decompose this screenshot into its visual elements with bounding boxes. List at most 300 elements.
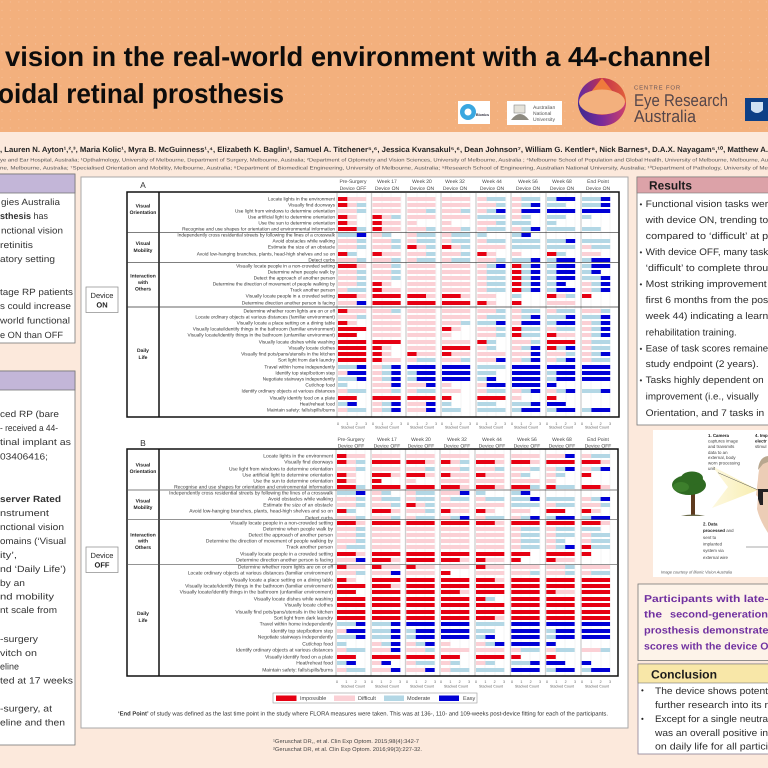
chart A (127, 179, 619, 430)
references: ²Geruschat DR, et al. Clin Exp Optom. 2016;99(3):227-32. (273, 747, 422, 753)
chart B column headers: Device OFF (374, 444, 400, 450)
chart A task labels: Visually locate dishes while washing (259, 340, 335, 346)
chart B task labels: Visually locate a place setting on a dining table (231, 578, 333, 584)
chart B section labels (130, 462, 156, 624)
icon: tree (672, 472, 706, 516)
chart A axis labels: 0 1 2 3 (581, 422, 611, 426)
chart A task labels: Maintain safety: falls/spills/burns (267, 408, 336, 414)
chart B axis labels: 0 1 2 3 (546, 680, 576, 684)
chart B section labels: Orientation (130, 469, 156, 475)
panel: methods: omains (‘Visual (0, 536, 66, 546)
chart A bars: end point (582, 199, 610, 410)
chart A column headers: Week 17 (377, 179, 397, 185)
title: oidal retinal prosthesis (0, 78, 284, 109)
label: data processed: external wire (703, 555, 728, 560)
logo: Centre for Eye Research Australia (578, 78, 728, 126)
device ON label: Device (91, 291, 113, 300)
callout: key finding (638, 584, 768, 660)
chart B bars: week 17 (372, 456, 400, 670)
panel: background: sthesis has (0, 211, 48, 221)
panel: results: • (640, 376, 642, 385)
chart A task labels: Locate lights in the environment (268, 197, 336, 203)
header banner (0, 0, 768, 132)
panel: results: improvement (i.e., visually (646, 392, 759, 402)
chart B axis labels: 0 1 2 3 (440, 680, 470, 684)
label: camera: unit (708, 466, 716, 471)
panel: conclusion: further research into its r (655, 700, 768, 711)
chart B column headers: Week 17 (377, 437, 397, 443)
chart A task labels: Use artificial light to determine orientation (248, 215, 335, 221)
panel: results: Functional vision tasks wer (646, 199, 768, 210)
chart B column headers: Device OFF (549, 444, 575, 450)
panel: methods: nctional vision (0, 522, 64, 532)
device OFF label (86, 547, 118, 572)
chart B task labels: Estimate the size of an obstacle (263, 503, 333, 509)
chart B column headers: Week 32 (447, 437, 467, 443)
label: implant: stimul (755, 444, 766, 449)
label: data processed: implanted (703, 542, 723, 546)
chart A bars: week 32 (442, 199, 470, 410)
chart A section labels: Visual (136, 241, 151, 247)
chart A axis labels: 0 1 2 3 (546, 422, 576, 426)
label: data processed: processed and (703, 528, 734, 533)
legend: Impossible (300, 696, 326, 702)
chart B column headers: Week 68 (552, 437, 572, 443)
chart A column headers: Week 32 (445, 179, 465, 185)
panel: conclusion: on daily life for all partici (655, 742, 768, 752)
panel: results: rehabilitation training. (646, 328, 737, 338)
logo: Australian National University: University (533, 117, 555, 123)
chart B task labels: Recognise and use shapes for orientation and environmental information (174, 485, 333, 491)
logo: Australian National University: National (533, 111, 551, 117)
chart A task labels: Use the sun to determine orientation (258, 221, 335, 227)
results heading (637, 177, 768, 193)
callout: key finding: second-generation (670, 610, 768, 620)
chart B axis labels: Stacked Count (515, 684, 539, 688)
logo: Australian National University (507, 101, 562, 125)
chart A axis labels: Stacked Count (375, 426, 399, 430)
chart B task labels: Visually locate/identify things in the bathroom (familiar environment) (185, 584, 333, 590)
logo: Bionics (458, 101, 490, 124)
chart B axis labels: Stacked Count (550, 684, 574, 688)
label: data processed: sent to (703, 535, 717, 540)
results heading: Results (649, 178, 692, 192)
chart B task labels: Determine direction another person is facing (236, 558, 333, 564)
chart A column headers: Pre-Surgery (340, 179, 367, 185)
chart A axis labels: Stacked Count (410, 426, 434, 430)
chart B axis labels: 0 1 2 3 (336, 680, 366, 684)
chart A section labels: Visual (136, 204, 151, 210)
chart A column headers: Device ON (375, 186, 399, 192)
chart B bars: pre-surgery (337, 456, 365, 670)
chart B task labels: Determine the direction of movement of people walking by (206, 539, 334, 545)
chart A task labels: Identify top step/bottom step (275, 371, 335, 377)
panel: background: e ON than OFF (0, 330, 64, 340)
device OFF label: Device (91, 551, 113, 560)
chart B task labels: Visually locate people in a non-crowded setting (230, 521, 333, 527)
chart A axis labels: Stacked Count (514, 426, 538, 430)
chart A column headers: Week 20 (412, 179, 432, 185)
chart B axis labels: 0 1 2 3 (406, 680, 436, 684)
chart A task labels: Visually find pots/pans/utensils in the kitchen (241, 352, 335, 358)
chart A axis labels: Stacked Count (445, 426, 469, 430)
panel: background: atory setting (0, 254, 55, 264)
icon: head with glasses (718, 456, 768, 547)
chart A task labels: Visually find doorways (288, 203, 336, 209)
chart A column headers: Device ON (443, 186, 467, 192)
panel: background: s could increase (0, 301, 71, 311)
chart B task labels: Cut/chop food (302, 642, 333, 648)
device OFF label: OFF (94, 560, 110, 570)
chart A task labels: Visually locate people in a non-crowded setting (236, 264, 335, 270)
chart B column headers: Week 56 (517, 437, 537, 443)
chart B axis labels: 0 1 2 3 (511, 680, 541, 684)
affiliations: ne, Melbourne, Australia; ⁷Specialised Orientation and Mobility, Melbourne, Australia; ⁸Department of Biomedical Engineering, University of Melbourne, Australia; ⁹Research School of Engineering, Australian National University, Australia; ¹⁰Department of Pathology, University of Me (0, 166, 768, 172)
chart B task labels: Visually locate clothes (284, 603, 334, 609)
chart B task labels: Identify top step/bottom step (271, 629, 333, 635)
title: vision in the real-world environment with a 44-channel (5, 41, 711, 72)
chart B column headers: Device OFF (479, 444, 505, 450)
callout: key finding: the (644, 610, 663, 620)
chart B task labels: Avoid obstacles while walking (268, 497, 333, 503)
device ON label (86, 287, 118, 312)
panel: methods: -surgery, at (0, 704, 53, 714)
chart B bars: week 44 (476, 456, 504, 670)
chart B section labels: Life (139, 618, 148, 624)
references: ¹Geruschat DR,, et al. Clin Exp Optom. 2015;98(4):342-7 (273, 739, 419, 745)
chart A: A (140, 180, 146, 190)
panel: conclusion: Except for a single neutra (655, 714, 768, 725)
chart A frame (127, 192, 619, 417)
chart B section labels: Others (135, 545, 151, 551)
panel: results: with device ON, trending to (645, 215, 768, 226)
chart B axis labels: 0 1 2 3 (371, 680, 401, 684)
panel: background: gies Australia (1, 197, 60, 207)
chart B bars: week 20 (406, 456, 435, 670)
chart A axis labels: 0 1 2 3 (441, 422, 471, 426)
chart A task labels: Negotiate stairways independently (263, 377, 336, 383)
chart A task labels: Recognise and use shapes for orientation and environmental information (182, 227, 335, 233)
chart A task labels: Visually locate people in a crowded setting (246, 294, 335, 300)
label: data processed: 2. Data (703, 522, 718, 526)
chart B column headers: Device OFF (408, 444, 434, 450)
chart B task labels: Detect the approach of another person (248, 533, 333, 539)
panel: methods: tinal implant as (0, 437, 72, 447)
chart B task labels: Independently cross residential streets by following the lines of a crosswalk (169, 491, 334, 497)
chart B task labels: Visually locate/identify things in the bathroom (unfamiliar environment) (180, 590, 333, 596)
chart A task labels: Track another person (290, 288, 335, 294)
panel: background: tage RP patients (0, 287, 74, 297)
chart A task labels: Visually locate clothes (288, 346, 336, 352)
label: implant: 4. Imp (755, 433, 768, 438)
chart B axis labels: Stacked Count (585, 684, 609, 688)
label: implant: electr (755, 438, 767, 444)
chart A axis labels: 0 1 2 3 (476, 422, 506, 426)
chart B column headers: Device OFF (338, 444, 364, 450)
label: camera: and transmits (708, 444, 735, 449)
chart A section labels: with (137, 280, 148, 286)
chart A bars: week 20 (407, 199, 436, 410)
chart B section labels: Visual (136, 462, 151, 468)
chart A section labels: Orientation (130, 210, 156, 216)
chart B bars: end point (582, 456, 610, 670)
panel: methods: ted at 17 weeks (0, 676, 74, 686)
chart A task labels: Visually locate a place setting on a dining table (237, 321, 335, 327)
chart A section labels: Mobility (134, 248, 153, 254)
chart A bars: week 68 (547, 199, 575, 410)
panel: methods: ced RP (bare (0, 409, 59, 419)
panel: methods (0, 371, 75, 745)
panel: background: nctional vision (1, 226, 63, 236)
chart A column headers: Device ON (550, 186, 574, 192)
chart A task labels: Locate ordinary objects at various distances (familiar environment) (195, 315, 335, 321)
chart A column headers (340, 179, 610, 192)
device ON label: ON (96, 300, 108, 310)
callout: key finding: Participants with late- (644, 594, 768, 605)
chart A column headers: Week 68 (552, 179, 572, 185)
chart A task labels: Identify ordinary objects at various distances (242, 389, 336, 395)
panel: results: week 44) indicating a learn (645, 311, 768, 322)
panel: methods: nt scale from (0, 605, 57, 615)
references (273, 739, 422, 753)
panel: results: Most striking improvement (646, 279, 767, 290)
chart B section labels: Visual (136, 498, 151, 504)
chart A task labels: Estimate the size of an obstacle (268, 245, 335, 251)
title (0, 41, 711, 109)
chart B (127, 437, 618, 688)
panel: background: world functional (0, 316, 70, 326)
chart A task labels: Visually locate/identify things in the bathroom (unfamiliar environment) (187, 333, 335, 339)
chart B section labels: Daily (137, 611, 149, 617)
chart A task labels: Independently cross residential streets by following the lines of a crosswalk (177, 233, 336, 239)
callout: key finding: scores with the device O (644, 642, 768, 652)
chart A task labels: Travel within home independently (264, 365, 336, 371)
affiliations: ye and Ear Hospital, Australia; ¹Opthalmology, University of Melbourne, Department of Surgery, Melbourne, Australia; ²Department of Optometry and Vision Sciences, University of Melbourne, Australia ; ⁴Melbourne School of Population and Global Health, University of Melbourne, Melbourne, Au (0, 158, 768, 164)
panel: conclusion: • (641, 686, 644, 695)
chart A column headers: Device ON (410, 186, 434, 192)
panel: conclusion: The device shows potent (655, 686, 768, 697)
chart B axis labels (336, 680, 611, 688)
label: camera: worn processing (708, 461, 741, 466)
legend: Easy (463, 696, 475, 702)
panel: methods: 03406416; (0, 452, 48, 462)
panel: results: • (640, 248, 642, 257)
chart B task labels: Use light from windows to determine orientation (229, 467, 333, 473)
chart B task labels: Heat/reheat food (296, 661, 333, 667)
chart A task labels: Determine whether room lights are on or off (243, 309, 336, 315)
chart B axis labels: Stacked Count (341, 684, 365, 688)
chart A axis labels: 0 1 2 3 (337, 422, 367, 426)
chart B section labels: Interaction (130, 532, 156, 538)
chart B task labels: Visually find pots/pans/utensils in the kitchen (235, 610, 333, 616)
panel: results: ‘difficult’ to complete throu (646, 263, 768, 274)
label: data processed (703, 522, 734, 560)
image credit: Image courtesy of Bionic Vision Australia (661, 570, 733, 574)
chart A column headers: Device ON (480, 186, 504, 192)
chart B section labels: Mobility (134, 505, 153, 511)
logo: Bionics: Bionics (476, 113, 489, 117)
chart B frame (127, 449, 618, 676)
panel: methods: ity’, (0, 550, 17, 560)
chart B: B (140, 438, 146, 448)
chart A axis labels: Stacked Count (479, 426, 503, 430)
label: implant (755, 433, 768, 449)
chart B column headers: Week 44 (482, 437, 502, 443)
chart B axis labels: 0 1 2 3 (581, 680, 611, 684)
panel: methods: nd mobility (0, 592, 55, 602)
chart A section labels: Interaction (130, 274, 156, 280)
chart A axis labels: Stacked Count (341, 426, 365, 430)
label: data processed: system via (703, 548, 724, 553)
chart B task labels: Use the sun to determine orientation (253, 479, 333, 485)
chart B task labels: Avoid low-hanging branches, plants, head-high shelves and so on (189, 509, 333, 515)
chart B task labels: Negotiate stairways independently (258, 635, 334, 641)
chart B task labels: Sort light from dark laundry (274, 616, 334, 622)
chart B bars: week 56 (511, 456, 540, 670)
chart A task labels: Visually identify food on a plate (270, 396, 335, 402)
chart A bars: week 17 (372, 199, 401, 410)
chart A task labels: Determine the direction of movement of people walking by (213, 282, 336, 288)
panel: background: retinitis (0, 240, 34, 250)
legend (273, 693, 477, 703)
chart A task labels: Sort light from dark laundry (278, 358, 336, 364)
chart A column headers: Device ON (586, 186, 610, 192)
panel: methods: vitch on (0, 648, 37, 658)
chart A axis labels: Stacked Count (549, 426, 573, 430)
chart B axis labels: Stacked Count (479, 684, 503, 688)
end point note: ‘End Point’ of study was defined as the last time point in the study where FLORA measures were taken. This was at 136-, 110- and 109-weeks post-device fitting for each of the participants. (118, 710, 608, 718)
panel: results: • (640, 344, 642, 354)
chart A bars: week 44 (477, 199, 506, 410)
chart B column headers: Week 20 (411, 437, 431, 443)
chart B task labels: Determine whether room lights are on or off (238, 565, 334, 571)
panel: results (637, 177, 768, 425)
chart A bars: pre-surgery (338, 199, 366, 410)
panel: results: • (640, 200, 642, 209)
panel: methods: -surgery (0, 634, 39, 644)
panel: conclusion (638, 664, 768, 754)
chart A task labels: Determine direction another person is facing (242, 301, 335, 307)
panel: device illustration (653, 430, 768, 577)
chart B axis labels: Stacked Count (410, 684, 434, 688)
chart B task labels: Travel within home independently (260, 622, 334, 628)
chart A column headers: Device OFF (340, 186, 366, 192)
panel: results: first 6 months from the pos (646, 295, 768, 306)
chart B task labels: Visually identify food on a plate (265, 655, 333, 661)
chart A task labels: Cut/chop food (305, 383, 335, 389)
chart B task labels: Maintain safety: falls/spills/burns (262, 668, 334, 674)
legend: Difficult (358, 696, 376, 702)
chart B bars: week 68 (546, 456, 575, 670)
chart B task labels: Locate lights in the environment (263, 454, 334, 460)
chart A task labels (177, 197, 336, 414)
chart B task labels: Locate ordinary objects at various distances (familiar environment) (188, 571, 333, 577)
logo: Centre for Eye Research Australia: Eye Research (634, 91, 728, 110)
chart B task labels: Visually locate dishes while washing (254, 597, 333, 603)
label: camera: data to an (708, 450, 728, 455)
panel: results figure (81, 177, 628, 728)
panel: results: Orientation, and 7 tasks in (646, 408, 764, 419)
callout: key finding: prosthesis demonstrate (644, 626, 768, 636)
chart B column headers: Device OFF (585, 444, 611, 450)
chart B column headers: End Point (587, 437, 609, 443)
chart B column headers: Device OFF (514, 444, 540, 450)
chart B task labels: Determine when people walk by (263, 527, 334, 533)
chart A axis labels: 0 1 2 3 (511, 422, 541, 426)
label: camera (708, 433, 741, 471)
chart A task labels: Heat/reheat food (300, 402, 335, 408)
chart B task labels: Identify ordinary objects at various distances (236, 648, 334, 654)
panel: methods: - received a 44- (0, 423, 58, 433)
chart A section labels: Others (135, 286, 151, 292)
chart A task labels: Visually locate/identify things in the bathroom (familiar environment) (193, 327, 335, 333)
chart A axis labels (337, 422, 611, 430)
chart B column headers (338, 437, 611, 450)
chart A task labels: Determine when people walk by (268, 270, 336, 276)
legend: Moderate (407, 696, 430, 702)
panel: methods: by an (0, 578, 25, 588)
chart B axis labels: Stacked Count (444, 684, 468, 688)
panel: results: Tasks highly dependent on (646, 375, 764, 386)
chart A task labels: Use light from windows to determine orientation (235, 209, 335, 215)
chart A section labels: Daily (137, 348, 149, 354)
authors: , Lauren N. Ayton¹,²,³, Maria Kolic¹, Myra B. McGuinness¹,⁴, Elizabeth K. Baglin¹, Samuel A. Titchener⁵,⁶, Jessica Kvansakul⁵,⁶, Dean Johnson⁷, William G. Kentler⁸, Nick Barnes⁹, D.A.X. Nayagam⁵,¹⁰, Matthew A. (0, 145, 768, 154)
chart A task labels: Detect curbs (308, 258, 336, 264)
chart B task labels: Use artificial light to determine orientation (242, 473, 333, 479)
panel: methods: server Rated (0, 494, 61, 504)
chart B column headers: Pre-Surgery (338, 437, 365, 443)
chart A task labels: Detect the approach of another person (254, 276, 335, 282)
chart A axis labels: Stacked Count (585, 426, 609, 430)
chart B task labels (169, 454, 334, 674)
chart A column headers: Device ON (516, 186, 540, 192)
chart A task labels: Avoid low-hanging branches, plants, head-high shelves and so on (197, 252, 335, 258)
chart B task labels: Detect curbs (305, 516, 334, 522)
panel: methods: eline (0, 662, 19, 672)
panel: methods: nstrument (0, 508, 50, 518)
panel: results: • (640, 280, 642, 289)
logo: University of Melbourne (745, 98, 768, 121)
panel: results: Ease of task scores remaine (646, 344, 768, 354)
chart A column headers: Week 44 (482, 179, 502, 185)
chart B column headers: Device OFF (444, 444, 470, 450)
chart A column headers: End Point (587, 179, 609, 185)
chart B bars: week 32 (441, 456, 469, 670)
logo: Centre for Eye Research Australia: CENTRE FOR (634, 84, 681, 92)
label: camera: 1. Camera (708, 433, 730, 438)
panel: conclusion: was an overall positive in (654, 728, 768, 739)
chart A axis labels: 0 1 2 3 (372, 422, 402, 426)
panel: results: With device OFF, many task (646, 247, 768, 258)
panel: methods: nd ‘Daily Life’) (0, 564, 66, 574)
chart B axis labels: Stacked Count (375, 684, 399, 688)
chart A axis labels: 0 1 2 3 (407, 422, 437, 426)
chart B section labels: with (137, 538, 148, 544)
panel: conclusion: • (641, 714, 644, 724)
chart A task labels: Avoid obstacles while walking (272, 239, 335, 245)
label: camera: captures image (708, 439, 739, 444)
chart A column headers: Week 56 (518, 179, 538, 185)
chart A bars: week 56 (512, 199, 540, 410)
panel: results: study endpoint (2 years). (646, 359, 759, 370)
affiliations (0, 158, 768, 172)
label: camera: external, body (708, 455, 736, 460)
conclusion heading: Conclusion (651, 668, 717, 682)
chart B task labels: Track another person (286, 545, 333, 551)
chart B task labels: Visually locate people in a crowded setting (240, 552, 333, 558)
logo: Centre for Eye Research Australia: Australia (634, 107, 697, 126)
panel: background (0, 174, 75, 343)
